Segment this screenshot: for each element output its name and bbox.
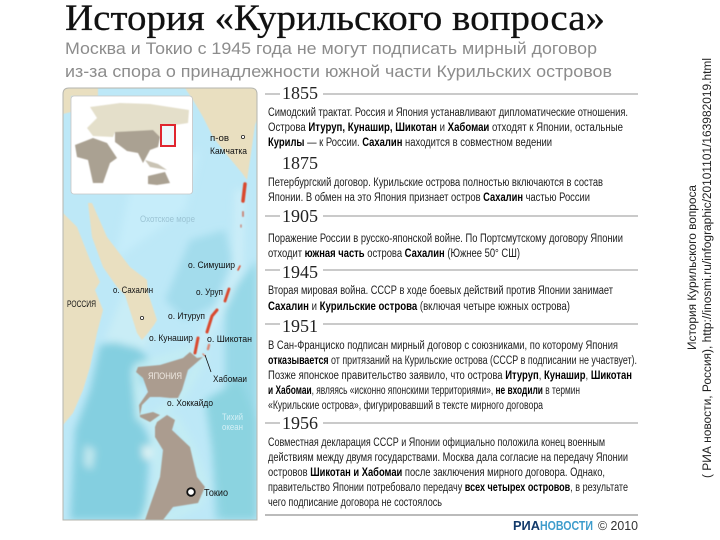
timeline: 1945: 1945 <box>282 262 318 282</box>
land: Sakhalin <box>88 203 157 340</box>
labels: place names: о. Кунашир <box>149 333 193 344</box>
timeline: 1855 <box>265 83 638 149</box>
subtitle: из-за спора о принадлежности южной части Курильских островов <box>65 62 612 81</box>
labels: place names: Токио <box>204 487 228 499</box>
land: Honshu <box>145 415 205 520</box>
subtitle <box>65 39 612 81</box>
timeline: 1855: 1855 <box>282 83 318 103</box>
marker: Sakhalin city <box>140 316 144 320</box>
logo: RIA Novosti: © 2010 <box>598 519 638 533</box>
source caption (rotated) <box>687 58 714 478</box>
timeline: 1945: Вторая мировая война. СССР в ходе боевых действий против Японии занимает <box>268 285 614 297</box>
timeline: 1951: 1951 <box>282 316 318 336</box>
timeline: 1875: 1875 <box>282 153 318 173</box>
timeline: 1905 <box>265 206 638 260</box>
timeline: 1875: Японии. В обмен на это Япония признает остров Сахалин частью России <box>268 192 590 204</box>
timeline: 1905: Поражение России в русско-японской войне. По Портсмутскому договору Японии <box>268 233 623 245</box>
labels: place names: о. Уруп <box>196 287 223 298</box>
labels: place names: о. Хоккайдо <box>167 398 213 409</box>
source caption (rotated): ( РИА новости, Россия), http://inosmi.ru/infographic/20101101/163982019.html <box>702 58 714 478</box>
timeline: 1875 <box>268 153 603 204</box>
timeline: 1956: правительство Японии потребовало передачу всех четырех островов, в результате <box>268 482 628 494</box>
labels: place names: п-ов <box>210 133 229 144</box>
land: Kamchatka <box>185 88 257 180</box>
logo: RIA Novosti <box>513 519 638 533</box>
labels: place names: о. Симушир <box>188 260 235 271</box>
timeline: 1855: Острова Итуруп, Кунашир, Шикотан и Хабомаи отходят к Японии, остальные <box>268 122 623 134</box>
marker: Tokyo <box>187 488 195 496</box>
timeline: 1956: Совместная декларация СССР и Японии официально положила конец военным <box>268 437 605 449</box>
subtitle: Москва и Токио с 1945 года не могут подписать мирный договор <box>65 39 597 58</box>
timeline: 1905: отходит южная часть острова Сахалин (Южнее 50° СШ) <box>268 248 520 260</box>
labels: place names: Хабомаи <box>213 374 247 385</box>
timeline: 1956: островов Шикотан и Хабомаи после заключения мирного договора. Однако, <box>268 467 605 479</box>
timeline: 1956 <box>265 413 638 509</box>
timeline: 1951: отказывается от притязаний на Курильские острова (СССР в подписании не участвует). <box>268 355 637 367</box>
labels: place names: о. Итуруп <box>168 311 205 322</box>
labels: place names <box>67 133 252 499</box>
logo: RIA Novosti: НОВОСТИ <box>540 519 593 533</box>
inset: red locator box <box>161 125 175 146</box>
inset: world map <box>71 96 192 194</box>
timeline: 1945: Сахалин и Курильские острова (включая четыре южных острова) <box>268 301 570 313</box>
logo: RIA Novosti: РИА <box>513 519 540 533</box>
timeline: 1956: действиям между двумя государствами. Москва дала согласие на передачу Японии <box>268 452 628 464</box>
land: northwest corner <box>63 88 98 114</box>
timeline: 1956: чего подписание договора не состоялось <box>268 497 442 509</box>
panel: map <box>63 88 257 520</box>
timeline: 1951: «Курильские острова», фигурировавший в тексте мирного договора <box>268 400 543 412</box>
labels: place names: океан <box>222 422 243 433</box>
land: Hokkaido <box>136 352 203 422</box>
labels: place names: Охотское море <box>140 214 195 225</box>
Habomai leader <box>205 355 211 372</box>
source caption (rotated): История Курильского вопроса <box>687 184 699 350</box>
labels: place names: РОССИЯ <box>67 299 96 310</box>
labels: place names: о. Шикотан <box>207 334 252 345</box>
shelf halos <box>128 356 154 520</box>
timeline: 1905: 1905 <box>282 206 318 226</box>
labels: place names: ЯПОНИЯ <box>148 371 182 382</box>
labels: place names: Тихий <box>222 412 243 423</box>
timeline: 1951: В Сан-Франциско подписан мирный договор с союзниками, по которому Япония <box>268 340 618 352</box>
labels: place names: о. Сахалин <box>113 285 153 296</box>
timeline: 1951: и Хабомаи, являясь «исконно японскими территориями», не входили в термин <box>268 385 580 397</box>
Kuril islands <box>195 184 245 356</box>
timeline: 1956: 1956 <box>282 413 318 433</box>
timeline: 1951: Позже японское правительство заявило, что острова Итуруп, Кунашир, Шикотан <box>268 370 632 382</box>
timeline: 1945 <box>265 262 638 313</box>
land: Russia mainland <box>63 213 103 425</box>
marker: Kamchatka city <box>241 135 245 139</box>
timeline: 1855: Курилы — к России. Сахалин находится в совместном ведении <box>268 137 552 149</box>
timeline: 1855: Симодский трактат. Россия и Япония устанавливают дипломатические отношения. <box>268 107 628 119</box>
labels: place names: Камчатка <box>210 146 248 157</box>
timeline: 1951 <box>265 316 638 412</box>
timeline: 1875: Петербургский договор. Курильские острова полностью включаются в состав <box>268 177 603 189</box>
